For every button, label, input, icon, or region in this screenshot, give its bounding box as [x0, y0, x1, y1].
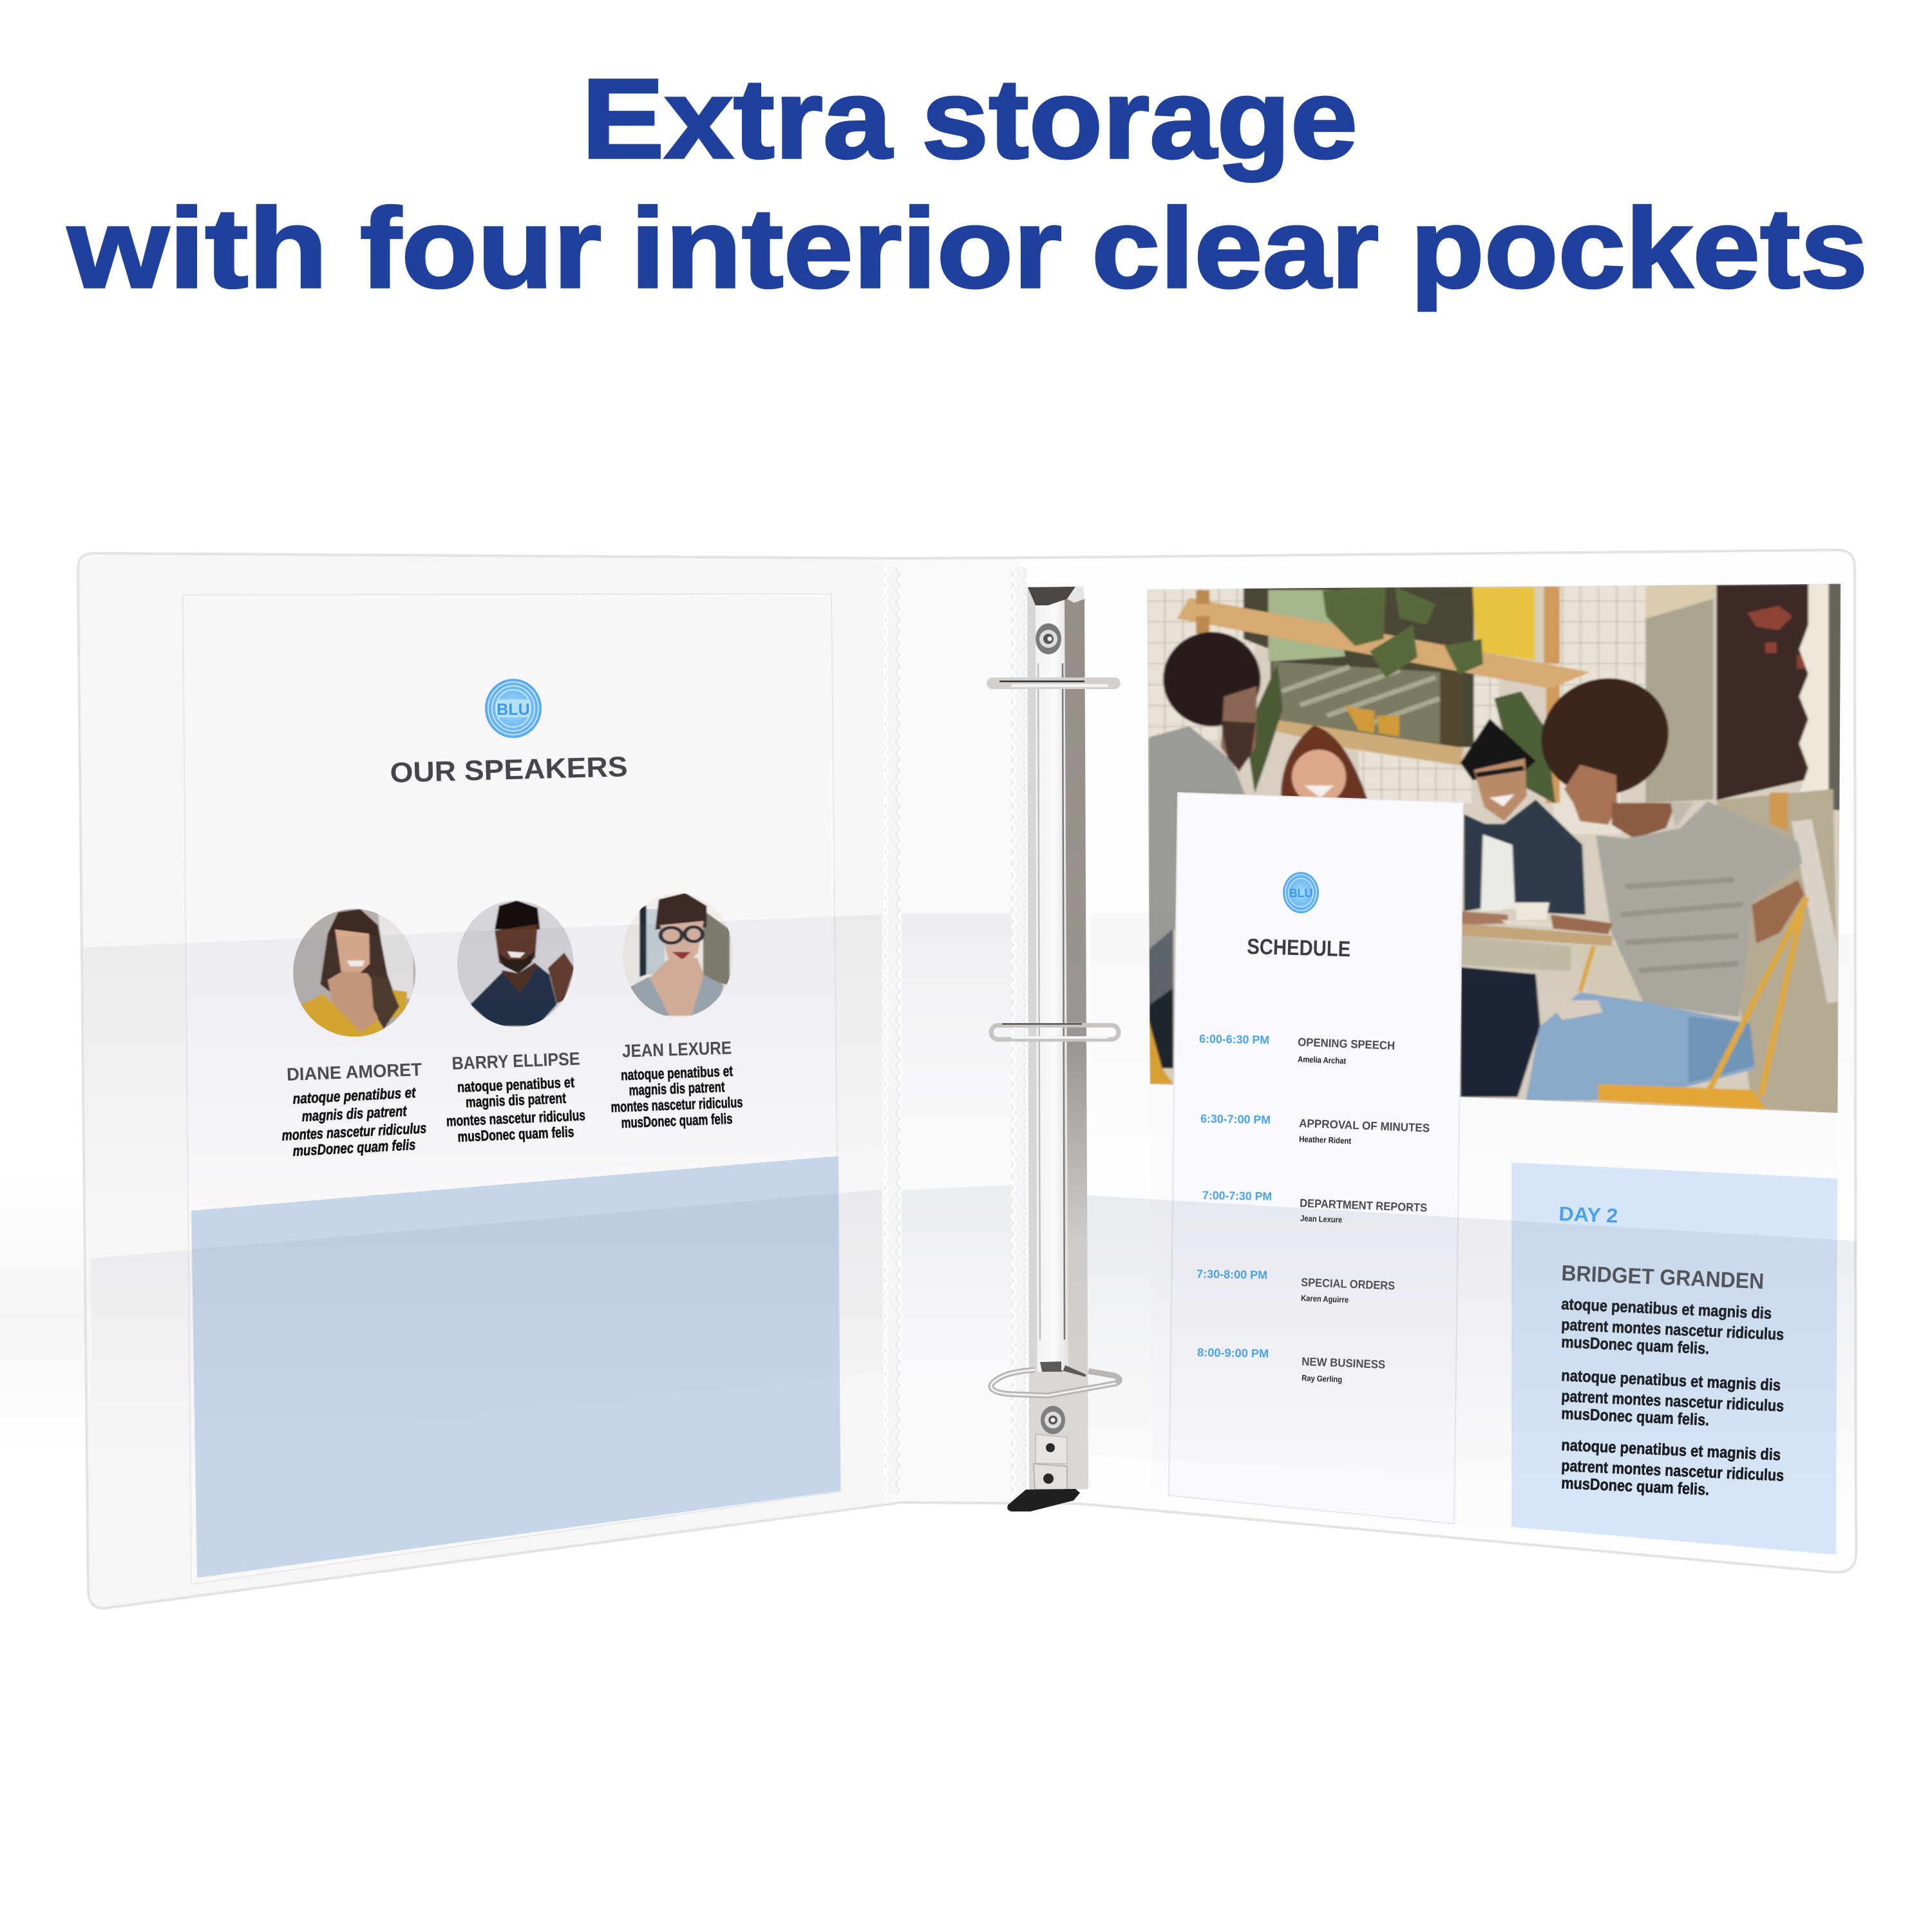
rail top corner: [1067, 587, 1084, 603]
portrait: Barry Ellipse: [455, 900, 579, 1028]
lower right background: [1716, 789, 1840, 1113]
paragraph 2: natoque penatibus et magnis dis: [1561, 1367, 1781, 1394]
paragraph 2: musDonec quam felis.: [1561, 1405, 1710, 1429]
title: pockets: [1410, 185, 1868, 312]
schedule row 5: NEW BUSINESS: [1302, 1355, 1386, 1371]
man left: [1149, 726, 1245, 950]
speaker bio: Diane Amoret: [281, 1059, 427, 1159]
speaker bio: Jean Lexure: natoque penatibus et: [621, 1063, 734, 1083]
spine pocket bands: [902, 913, 1011, 1385]
schedule row 1: 6:00-6:30 PM: [1199, 1032, 1269, 1046]
ring mechanism: [987, 587, 1121, 1511]
upper wall and grey panel: [1645, 584, 1716, 619]
ring 2: [991, 1024, 1119, 1039]
schedule row 5: Ray Gerling: [1302, 1373, 1342, 1384]
schedule row 2: APPROVAL OF MINUTES: [1299, 1117, 1430, 1135]
blue block on sheet: [191, 1156, 840, 1578]
schedule row 4: Karen Aguirre: [1301, 1293, 1349, 1305]
portrait: Jean Lexure: [620, 893, 735, 1019]
schedule row 1: [1199, 1032, 1396, 1066]
logo: BLU small: BLU: [1289, 887, 1312, 900]
speaker bio: Jean Lexure: montes nascetur ridiculus: [611, 1094, 743, 1115]
backdrop shadow haze: [0, 1179, 97, 1449]
schedule row 1: Amelia Archat: [1298, 1054, 1347, 1066]
title: clear: [1092, 185, 1379, 312]
schedule row 4: SPECIAL ORDERS: [1301, 1276, 1396, 1293]
speaker bio: Diane Amoret: DIANE AMORET: [287, 1059, 422, 1084]
speaker bio: Diane Amoret: montes nascetur ridiculus: [281, 1119, 427, 1144]
schedule row 4: [1197, 1267, 1396, 1305]
schedule row 2: 6:30-7:00 PM: [1200, 1112, 1271, 1126]
table: [1461, 923, 1613, 946]
schedule row 3: [1202, 1189, 1427, 1224]
paragraph 2: [1561, 1367, 1785, 1429]
bottom rail plate: [1030, 1372, 1088, 1490]
rail top dark notch: [1028, 587, 1075, 605]
speaker bio: Jean Lexure: [611, 1037, 743, 1131]
ring 1: [987, 677, 1121, 689]
metal rail right plate: [1065, 599, 1088, 1489]
title: [67, 56, 1868, 312]
sheet: our speakers: [183, 594, 840, 1584]
binder outline: [78, 550, 1856, 1608]
cafe photo: [1146, 580, 1846, 1117]
heading: our speakers: OUR SPEAKERS: [390, 751, 628, 789]
paragraph 1: patrent montes nascetur ridiculus: [1561, 1316, 1785, 1344]
metal rail centre plate: [1036, 587, 1070, 1489]
title: with: [67, 185, 328, 312]
panel: left cover: [78, 553, 884, 1608]
shelves: [1177, 598, 1590, 688]
panel: spine: [884, 558, 1030, 1502]
speaker bio: Diane Amoret: magnis dis patrent: [301, 1103, 408, 1124]
schedule row 2: Heather Rident: [1299, 1134, 1352, 1146]
day 2 text: [1558, 1202, 1785, 1499]
spine stitched seam: [885, 567, 1027, 1497]
heading: schedule: SCHEDULE: [1247, 934, 1351, 961]
speaker bio: Barry Ellipse: BARRY ELLIPSE: [451, 1048, 580, 1074]
title: Extra: [582, 56, 893, 182]
open binder: [0, 550, 1856, 1608]
woman right: [1530, 670, 1680, 803]
ring 3: [991, 1370, 1119, 1396]
panel: right cover: [1020, 550, 1856, 1572]
ring clip: [1040, 1361, 1086, 1377]
speaker bio: Barry Ellipse: [446, 1048, 585, 1145]
schedule row 5: [1197, 1346, 1386, 1384]
top rivet: [1036, 623, 1061, 654]
plants: [1323, 587, 1483, 678]
speaker bio: Jean Lexure: magnis dis patrent: [629, 1078, 725, 1099]
title: four: [360, 185, 601, 312]
paragraph 1: musDonec quam felis.: [1561, 1333, 1710, 1358]
hat man: [1461, 719, 1536, 781]
portraits row: [289, 893, 735, 1041]
dark window: [1716, 584, 1810, 800]
woman centre: [1281, 726, 1368, 800]
sheet: white under photo: [1150, 1084, 1837, 1527]
schedule row 2: [1200, 1112, 1430, 1146]
infographic canvas: [0, 79, 1864, 1610]
right clear pocket: [1086, 1195, 1856, 1501]
speaker bio: Jean Lexure: musDonec quam felis: [621, 1110, 733, 1131]
left clear pocket lower: [91, 1189, 883, 1455]
schedule row 1: OPENING SPEECH: [1298, 1036, 1396, 1052]
rail dark centre lines: [1038, 663, 1065, 1340]
heading: day 2: DAY 2: [1558, 1202, 1618, 1227]
speaker name: Bridget Granden: BRIDGET GRANDEN: [1561, 1261, 1765, 1294]
title: storage: [922, 56, 1358, 182]
schedule row 3: Jean Lexure: [1300, 1213, 1342, 1224]
chair: [1598, 1084, 1766, 1110]
sheet paper: [183, 594, 840, 1584]
sheet: day 2 blue block: [1511, 1162, 1837, 1555]
paragraph 1: [1561, 1295, 1785, 1358]
black lever tab: [1007, 1489, 1080, 1511]
logo: BLU: [485, 679, 542, 738]
title: interior: [630, 185, 1062, 312]
portrait: Diane Amoret: [293, 909, 416, 1037]
paragraph 3: [1561, 1436, 1785, 1499]
faint upper pocket on right cover: [1090, 913, 1855, 1179]
paragraph 1: atoque penatibus et magnis dis: [1561, 1295, 1772, 1323]
speaker bio: Jean Lexure: JEAN LEXURE: [622, 1037, 732, 1061]
speaker bio: Diane Amoret: natoque penatibus et: [292, 1084, 417, 1107]
schedule row 4: 7:30-8:00 PM: [1197, 1267, 1267, 1282]
bottom plates with holes: [1034, 1434, 1067, 1490]
metal rail left strip: [1027, 587, 1037, 1489]
blue sheet behind schedule: [1151, 1143, 1179, 1495]
schedule paper: [1169, 793, 1463, 1524]
speaker bio: Barry Ellipse: magnis dis patrent: [465, 1090, 567, 1110]
schedule row 5: 8:00-9:00 PM: [1197, 1346, 1269, 1360]
jeans: [1526, 992, 1754, 1101]
schedule row 3: 7:00-7:30 PM: [1202, 1189, 1272, 1203]
paragraph 2: patrent montes nascetur ridiculus: [1561, 1387, 1785, 1416]
sheet: schedule: [1169, 793, 1463, 1524]
paragraph 3: natoque penatibus et magnis dis: [1561, 1436, 1781, 1464]
paragraph 3: musDonec quam felis.: [1561, 1474, 1710, 1499]
paragraph 3: patrent montes nascetur ridiculus: [1561, 1457, 1785, 1485]
window behind shelves: [1244, 587, 1474, 747]
schedule row 3: DEPARTMENT REPORTS: [1300, 1197, 1427, 1215]
speaker bio: Barry Ellipse: natoque penatibus et: [457, 1074, 575, 1095]
logo: BLU small: [1283, 872, 1319, 913]
speaker bio: Barry Ellipse: montes nascetur ridiculus: [446, 1106, 585, 1130]
yellow box: [1473, 587, 1535, 661]
logo: BLU: BLU: [497, 701, 530, 719]
speaker bio: Barry Ellipse: musDonec quam felis: [457, 1123, 574, 1145]
bottom rivet: [1041, 1406, 1065, 1434]
left clear pocket upper: [83, 914, 882, 1211]
speaker bio: Diane Amoret: musDonec quam felis: [292, 1136, 416, 1159]
